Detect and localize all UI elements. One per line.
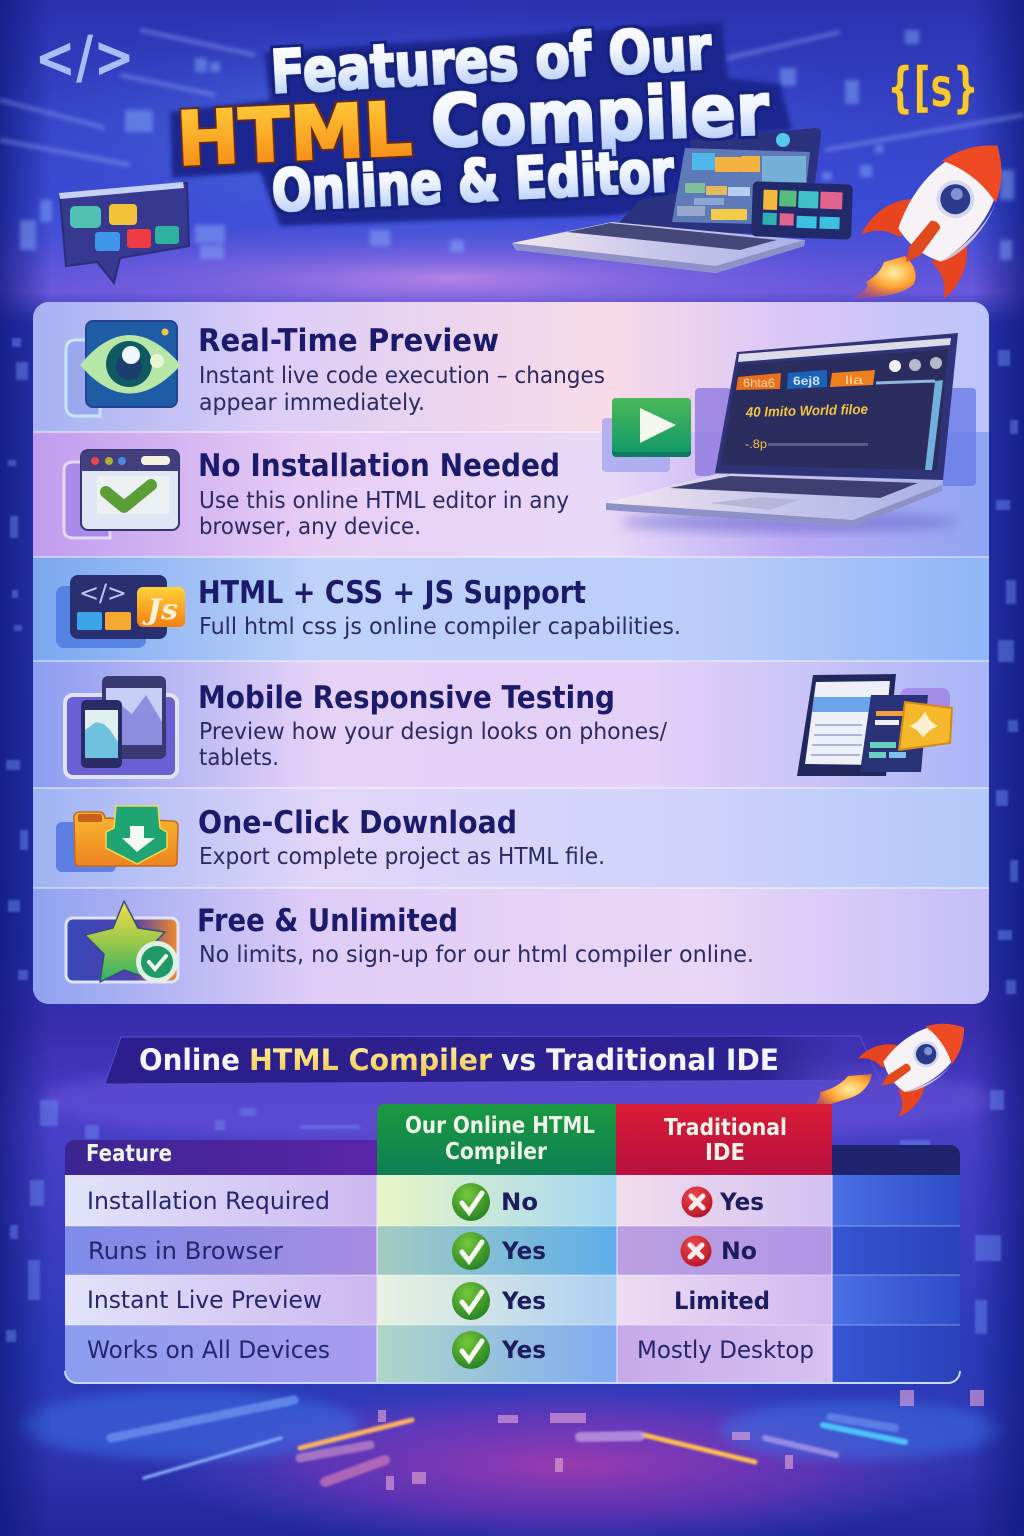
table header: Our Online HTML bbox=[405, 1113, 595, 1139]
description: Export complete project as HTML file. bbox=[199, 844, 605, 870]
row: installation required: Yes bbox=[719, 1188, 764, 1216]
row: installation required: Installation Required bbox=[87, 1187, 330, 1215]
row backgrounds bbox=[33, 302, 989, 1004]
row: no installation bbox=[64, 448, 569, 540]
icon: chat panel with tiles bbox=[59, 182, 189, 283]
description: Preview how your design looks on phones/ bbox=[199, 719, 667, 745]
description: No limits, no sign-up for our html compiler online. bbox=[199, 942, 754, 968]
comparison heading banner: HTML Compiler bbox=[249, 1043, 493, 1077]
icon: code window with js badge bbox=[56, 575, 185, 648]
row: instant live preview: Yes bbox=[501, 1287, 546, 1315]
row: runs in browser bbox=[88, 1232, 757, 1270]
description: browser, any device. bbox=[199, 514, 421, 540]
heading: Free & Unlimited bbox=[197, 903, 458, 939]
icon: tablet with gold badge bbox=[797, 674, 952, 776]
row: runs in browser: No bbox=[721, 1237, 757, 1265]
illustration: rocket bbox=[852, 112, 1024, 300]
row: instant live preview: Instant Live Preview bbox=[87, 1286, 322, 1314]
title: Compiler bbox=[429, 67, 771, 164]
row: works on all devices: Mostly Desktop bbox=[637, 1336, 814, 1364]
icon: curly brace badge: {[s} bbox=[887, 56, 979, 119]
row: real-time preview bbox=[66, 321, 605, 416]
description bbox=[199, 719, 667, 771]
title: Online & Editor bbox=[270, 137, 676, 225]
description: tablets. bbox=[199, 745, 279, 771]
panel: features bbox=[33, 302, 989, 1004]
table cells bbox=[65, 1175, 960, 1383]
description: appear immediately. bbox=[199, 390, 425, 416]
icon: eye bbox=[66, 321, 181, 416]
description bbox=[199, 363, 605, 416]
row: html css js bbox=[56, 575, 681, 648]
title backing shape bbox=[170, 22, 792, 226]
icon: code brackets: </> bbox=[34, 22, 135, 92]
row: works on all devices: Works on All Devices bbox=[87, 1336, 330, 1364]
comparison table bbox=[65, 1104, 960, 1383]
description: Full html css js online compiler capabilities. bbox=[199, 614, 681, 640]
row: free unlimited bbox=[66, 901, 754, 983]
heading: One-Click Download bbox=[198, 805, 517, 841]
description: Instant live code execution – changes bbox=[199, 363, 605, 389]
table header: IDE bbox=[705, 1140, 745, 1166]
row: installation required bbox=[87, 1183, 764, 1221]
row: instant live preview bbox=[87, 1282, 770, 1320]
heading: HTML + CSS + JS Support bbox=[198, 575, 586, 611]
row: works on all devices bbox=[87, 1331, 814, 1369]
description bbox=[199, 488, 569, 540]
table header: Compiler bbox=[445, 1139, 548, 1165]
row: runs in browser: Runs in Browser bbox=[88, 1237, 283, 1265]
description: Use this online HTML editor in any bbox=[199, 488, 569, 514]
illustration: laptop with play button bbox=[602, 333, 976, 532]
comparison heading banner: Online bbox=[139, 1043, 240, 1077]
row: mobile testing bbox=[65, 674, 952, 777]
illustration: header laptop and tablet bbox=[512, 128, 853, 273]
icon: star with check bbox=[66, 901, 178, 983]
icon: phone and tablet bbox=[65, 676, 177, 777]
table header bbox=[65, 1104, 960, 1175]
icon: folder with download arrow bbox=[56, 806, 178, 872]
heading: No Installation Needed bbox=[198, 448, 560, 484]
table header: Traditional bbox=[664, 1115, 787, 1141]
illustration: laptop with play button: lia bbox=[845, 373, 863, 387]
title bbox=[175, 13, 771, 225]
title: HTML bbox=[175, 86, 414, 183]
heading: Mobile Responsive Testing bbox=[198, 680, 615, 716]
row: works on all devices: Yes bbox=[501, 1336, 546, 1364]
illustration: laptop with play button: 6ej8 bbox=[793, 374, 820, 388]
illustration: laptop with play button: 40 Imito World filoe bbox=[745, 401, 868, 420]
row: download bbox=[56, 805, 605, 872]
icon: browser check bbox=[64, 450, 179, 538]
comparison heading banner: vs Traditional IDE bbox=[501, 1043, 779, 1077]
illustration: small rocket bbox=[808, 998, 985, 1118]
icon: code window with js badge: </> bbox=[79, 579, 127, 607]
icon: code window with js badge: Js bbox=[142, 593, 178, 626]
illustration: laptop with play button: 6hta6 bbox=[743, 376, 775, 390]
title: Features of Our bbox=[269, 13, 713, 108]
illustration: laptop with play button: -.8p bbox=[745, 437, 767, 451]
row: instant live preview: Limited bbox=[674, 1287, 770, 1315]
heading: Real-Time Preview bbox=[198, 323, 499, 359]
comparison heading banner bbox=[105, 1036, 880, 1084]
table header: Feature bbox=[86, 1141, 172, 1167]
row: installation required: No bbox=[501, 1188, 538, 1216]
row: runs in browser: Yes bbox=[501, 1237, 546, 1265]
